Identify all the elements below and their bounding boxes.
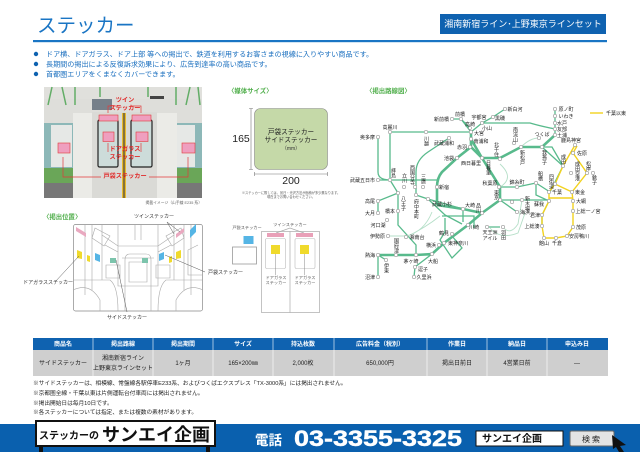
door diagram: ステッカー [266, 280, 286, 286]
route map: 高尾 [365, 198, 375, 205]
pricing table: 掲出期間 [171, 340, 195, 348]
route map: 熱海 [365, 252, 375, 259]
route map: 伊東 [383, 262, 389, 274]
route map: 北千住 [493, 141, 499, 157]
route map: いわき [558, 113, 574, 120]
route map: 館山 [539, 240, 549, 247]
route map: 南浦和 [473, 138, 489, 145]
route map: 川越 [423, 136, 429, 147]
pricing table: サイズ [234, 340, 252, 348]
pricing table: 商品名 [54, 340, 72, 348]
map legend: Chiba area line: 千葉以東 [606, 110, 626, 117]
route map: 鹿島神宮 [561, 137, 581, 144]
line-set badge: 湘南新宿ライン･上野東京ラインセット [444, 18, 602, 29]
size diagram: サイドステッカー [265, 136, 317, 144]
pricing table: 掲出路線 [111, 340, 135, 348]
route map: 国府津 [393, 238, 399, 254]
pricing table: 2,000枚 [292, 359, 314, 367]
route map: 横浜 [426, 242, 436, 249]
route map: 新松戸 [519, 149, 525, 166]
route map: 海浜 [520, 209, 530, 216]
photo: train door with sticker positions: ステッカー [110, 105, 140, 112]
pricing table: 持込枚数 [291, 340, 315, 348]
route map: アイル [483, 236, 497, 242]
search box: サンエイ企画 [482, 432, 542, 445]
sign: company name: サンエイ企画 [102, 425, 210, 445]
route map: 高崎 [465, 121, 475, 128]
sign: company name: ステッカーの [39, 430, 99, 442]
pricing table: 作業日 [448, 340, 466, 348]
route map: 武蔵浦和 [434, 140, 454, 147]
door diagram: ステッカー [295, 280, 315, 286]
feature bullets [34, 50, 373, 78]
route map: 小山 [482, 125, 492, 132]
door diagram [232, 222, 320, 312]
route map [350, 106, 601, 281]
heading: media size: 〈媒体サイズ〉 [228, 86, 273, 95]
route map: 新白河 [507, 106, 523, 113]
route map: 拝島 [390, 167, 396, 179]
route map: 立川 [401, 172, 407, 183]
pricing table: 650,000円 [366, 360, 394, 367]
route map: 武蔵小杉 [432, 201, 452, 208]
placement labels: ドアガラスステッカー [23, 279, 73, 286]
size diagram: ※ステッカーに際しては、景日・光沢方法が面積が多少異なります。 [242, 190, 340, 195]
route map: 日暮里 [485, 160, 491, 175]
pricing table: 4営業日前 [503, 359, 531, 367]
route map: 佐原 [577, 150, 587, 157]
route map: 宇都宮 [471, 114, 487, 121]
route map: 奥多摩 [360, 134, 375, 141]
pricing table: 掲出日前日 [442, 359, 472, 367]
route map: 大船 [428, 258, 438, 265]
route map: 我孫子 [541, 149, 547, 166]
route map: 原ノ町 [558, 107, 574, 113]
footer band [0, 421, 640, 452]
train interior illustration [55, 222, 205, 312]
pricing table: 165×200㎜ [228, 361, 258, 367]
line-set badge [440, 14, 606, 34]
pink twin stickers [76, 227, 184, 238]
route map: 川崎 [469, 224, 479, 231]
route map: 土浦 [557, 132, 567, 139]
yellow door glass stickers [77, 250, 181, 263]
size diagram: 現在までお問い合わせください。 [267, 194, 315, 199]
feature bullets: 首都圏エリアをくまなくカバーできます。 [46, 70, 180, 78]
blue door-pocket stickers [95, 224, 196, 262]
route map: 南流山 [512, 126, 518, 143]
route map: 秋葉原 [482, 180, 498, 187]
route map: 新木場 [524, 195, 530, 212]
route map: 西国分寺 [409, 165, 415, 185]
door diagram: ツインステッカー [273, 222, 307, 228]
footnotes: ※各ステッカーについては指定、または複数の素材があります。 [33, 408, 197, 416]
route map: 沼津 [365, 274, 375, 281]
search button [570, 431, 614, 446]
placement labels: サイドステッカー [107, 315, 147, 321]
route map: 鶴見 [439, 230, 449, 237]
route map: 湘南台 [409, 234, 425, 241]
route map: 君津 [530, 212, 540, 219]
size diagram: （mm） [282, 146, 300, 152]
phone number: 03-3355-3325 [294, 426, 462, 451]
route map: 大網 [576, 198, 586, 205]
photo: train door with sticker positions: ドアガラス [110, 145, 140, 153]
pricing table: ― [574, 361, 580, 367]
route map: 高麗川 [382, 124, 398, 131]
route map: 成田空港 [574, 160, 580, 181]
photo caption: 掲載イメージ（山手線 E235 系） [146, 200, 202, 205]
placement labels: 戸袋ステッカー [208, 269, 243, 276]
heading: placement: 〈掲出位置〉 [43, 212, 81, 221]
door diagram: ドアガラス [266, 274, 286, 281]
route map: 新前橋 [434, 116, 449, 123]
route map: 新宿 [439, 184, 449, 191]
route map: 船橋 [537, 170, 543, 182]
route map: 天王洲 [482, 230, 498, 236]
footnotes: ※京都圏全線・千葉以東は片側運転台付車両には掲出されません。 [33, 389, 203, 397]
map legend: Chiba area line [590, 110, 626, 117]
route map: 安房鴨川 [569, 233, 589, 240]
route map: 東京 [493, 189, 499, 200]
route map: 大崎 [465, 202, 475, 209]
size diagram: 200 [282, 175, 300, 187]
size diagram: 165 [232, 133, 250, 145]
pricing table: 納品日 [508, 340, 526, 348]
route map: 上総一ノ宮 [575, 208, 601, 215]
route map: 伊勢原 [370, 233, 385, 240]
route map: 八王子 [400, 196, 406, 212]
twin stickers [99, 115, 151, 121]
route map: 成田 [560, 153, 566, 165]
route map: つくば [534, 131, 550, 138]
pricing table [33, 338, 608, 376]
route map: 茂原 [576, 224, 586, 231]
route map: 羽田 [500, 230, 506, 241]
route map: 茅ヶ崎 [403, 258, 419, 265]
teal side stickers [110, 258, 148, 263]
pricing table: 上野東京ラインセット [93, 364, 153, 372]
title: ステッカー [37, 15, 135, 37]
route map: 品川 [475, 203, 481, 213]
door diagram: ドアガラス [295, 274, 315, 281]
route map: 東金 [575, 189, 585, 196]
route map: 三鷹 [420, 174, 426, 185]
phone number: 電話 [255, 433, 282, 448]
route map: 蘇我 [534, 201, 544, 208]
route map: 千葉 [552, 189, 562, 196]
feature bullets: 長期間の掲出による反復訴求効果により、広告到達率の高い商品です。 [46, 60, 272, 68]
route map: 武蔵五日市 [350, 177, 375, 184]
pricing table: サイドステッカー [39, 360, 87, 367]
pricing table: 広告料金（税別） [356, 340, 404, 348]
side stickers [58, 143, 195, 153]
placement labels: ツインステッカー [134, 214, 174, 220]
route map: 逗子 [418, 266, 428, 273]
photo: train door with sticker positions: ツイン [116, 97, 134, 104]
pricing table: 湘南新宿ライン [102, 354, 144, 362]
photo: train door with sticker positions: ステッカー [110, 154, 140, 161]
route map: 水戸 [557, 120, 567, 127]
photo: train door with sticker positions [44, 87, 202, 198]
route map: 前橋 [455, 111, 465, 118]
size diagram [232, 108, 340, 199]
placement labels [23, 214, 243, 321]
footnotes: ※掲出開始日は毎月10日です。 [33, 399, 113, 407]
route map: 橋本 [385, 208, 395, 215]
route map: 千倉 [552, 240, 562, 247]
route map: 東神奈川 [448, 240, 468, 247]
route map: 西日暮里 [461, 160, 481, 167]
route map: 松岸 [585, 160, 591, 172]
door glass stickers [103, 132, 148, 142]
route map: 府中本町 [413, 199, 419, 219]
search box [476, 431, 563, 446]
route map: 黒磯 [495, 115, 505, 122]
pricing table: 1ヶ月 [175, 360, 191, 367]
route map: 錦糸町 [509, 179, 525, 186]
heading: route map: 〈掲出路線図〉 [366, 86, 411, 95]
route map: 河口湖 [370, 222, 386, 229]
route map: 久里浜 [416, 274, 432, 281]
route map: 友部 [557, 126, 567, 133]
door diagram: 戸袋ステッカー [232, 224, 262, 231]
route map: 大宮 [474, 130, 484, 137]
photo: train door with sticker positions: 戸袋ステッカー [103, 172, 147, 180]
route map: 上総湊 [524, 223, 540, 230]
route map: 池袋 [444, 155, 454, 162]
route map: 四街道 [548, 174, 554, 190]
route map: 銚子 [591, 174, 597, 186]
size diagram: 戸袋ステッカー [268, 127, 314, 136]
phone number [255, 426, 462, 451]
footnotes: ※サイドステッカーは、相模線、常盤線各駅停車E233系、およびつくばエクスプレス「TX-3000系」には掲出されません。 [33, 379, 346, 387]
pricing table: 申込み日 [565, 340, 589, 348]
sign: company name [36, 421, 215, 452]
footnotes [33, 379, 346, 416]
search button: 検索 [582, 434, 602, 444]
icon: cursor arrow [612, 435, 626, 452]
route map: 赤羽 [457, 145, 467, 151]
route map: 大月 [365, 210, 375, 217]
feature bullets: ドア横、ドアガラス、ドア上部 等への掲出で、鉄道を利用するお客さまの視線に入りやすい商品です。 [46, 50, 373, 58]
